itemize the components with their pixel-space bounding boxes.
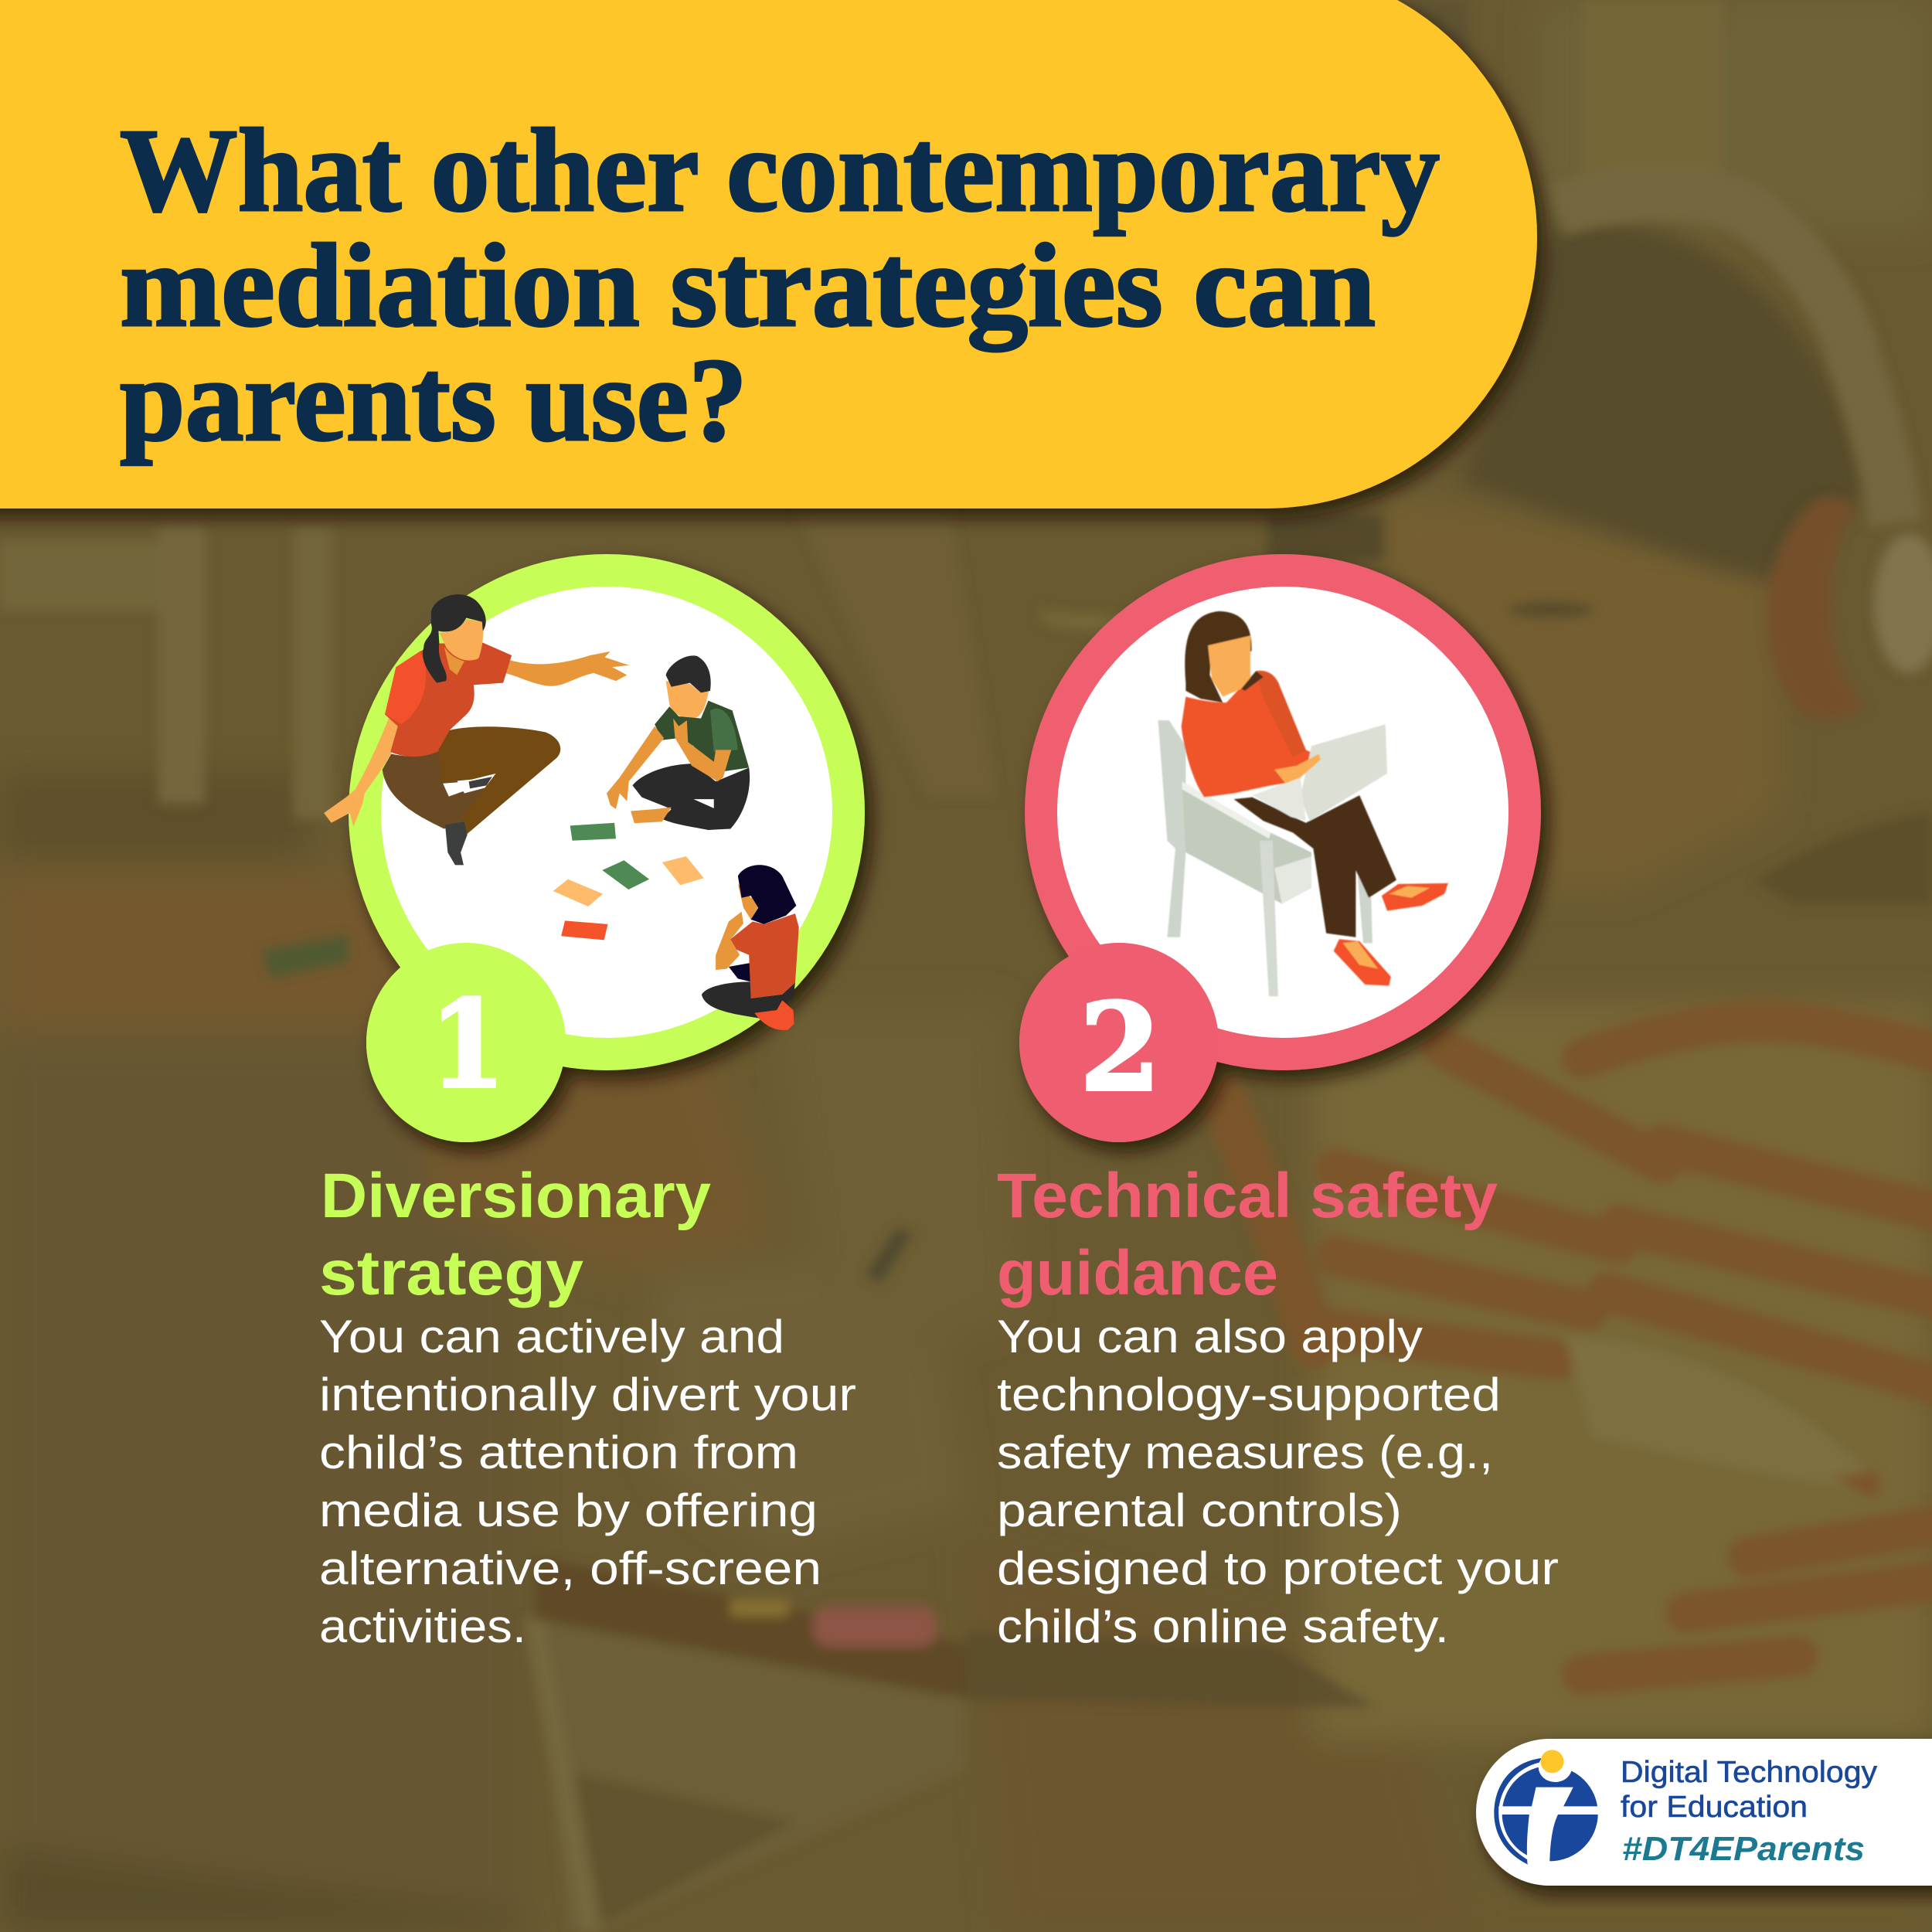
number 1: 1 [430,974,505,1115]
text block: diversionary description: You can actively and [319,1311,784,1362]
logo text: #DT4EParents [1622,1830,1865,1868]
logo text [1621,1756,1878,1868]
text block: diversionary description: child’s attention from [319,1427,798,1478]
title: What other contemporary [120,105,1440,236]
header banner [0,0,1537,509]
title: parents use? [120,335,747,466]
heading: technical safety guidance: guidance [997,1238,1278,1308]
text block: diversionary description: intentionally divert your [319,1369,856,1420]
illustration: woman on chair with laptop [1158,611,1448,996]
logo badge [1476,1739,1932,1886]
text block: technical safety description: You can also apply [997,1311,1423,1362]
logo text: Digital Technology [1621,1756,1878,1789]
text block: diversionary description: media use by offering [319,1485,818,1536]
heading: technical safety guidance [997,1161,1498,1308]
text block: technical safety description: designed to protect your [997,1543,1559,1594]
heading: diversionary strategy: Diversionary [321,1161,711,1231]
heading: technical safety guidance: Technical safety [997,1161,1498,1231]
text block: technical safety description: parental controls) [997,1485,1402,1536]
heading: diversionary strategy: strategy [319,1238,583,1308]
icon: DT4E logo [1494,1750,1598,1865]
logo text: for Education [1621,1791,1808,1824]
panel: strategy 2 circle [1019,554,1541,1142]
text block: diversionary description: activities. [319,1600,526,1652]
text block: diversionary description [319,1311,856,1652]
panel: strategy 1 circle [324,554,865,1142]
title: mediation strategies can [120,220,1376,352]
text block: technical safety description: child’s online safety. [997,1600,1449,1652]
text block: technical safety description: technology-supported [997,1369,1501,1420]
title [120,105,1440,466]
text block: technical safety description: safety measures (e.g., [997,1427,1493,1478]
text block: technical safety description [997,1311,1559,1652]
heading: diversionary strategy [319,1161,711,1308]
number 2: 2 [1080,977,1161,1118]
text block: diversionary description: alternative, off-screen [319,1543,821,1594]
illustration: family playing cards [324,594,799,1030]
